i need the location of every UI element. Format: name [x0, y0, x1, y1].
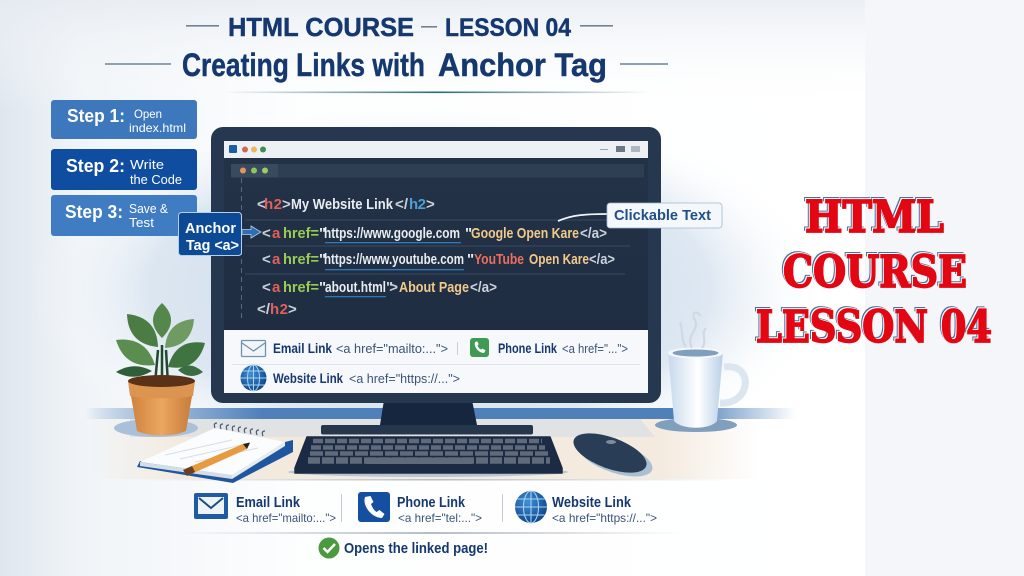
callout: clickable text — [558, 203, 722, 228]
icon: website globe — [515, 491, 547, 523]
code line: youtube link: href= — [283, 251, 319, 268]
code line: google link: " — [319, 225, 326, 242]
code line: h2 open — [257, 196, 435, 213]
desk — [85, 408, 795, 480]
code line: h2 open: < — [257, 196, 266, 213]
monitor stand — [321, 400, 533, 434]
code line: h2 close: </ — [257, 301, 271, 318]
icon: mouse — [569, 425, 657, 484]
arrow: anchor tag to code — [242, 226, 261, 238]
code line: google link: a — [272, 225, 281, 242]
title: Anchor Tag — [438, 47, 607, 83]
overlay heading — [756, 192, 992, 353]
code line: h2 open: h2 — [264, 196, 282, 213]
link info panel: <a href="https://..."> — [349, 371, 460, 386]
code line: google link: </a> — [580, 225, 607, 242]
step 3 box — [51, 195, 197, 236]
code line: h2 close: h2 — [270, 301, 288, 318]
link type row — [180, 491, 685, 534]
code line: about link: "> — [386, 279, 398, 296]
editor tab bar — [231, 164, 644, 178]
link type row: <a href="tel:..."> — [398, 511, 482, 525]
link info panel: Phone Link — [498, 340, 557, 356]
code line: youtube link — [262, 251, 615, 270]
code line: about link: " — [319, 279, 326, 296]
icon: phone — [358, 492, 390, 522]
link info panel — [224, 330, 648, 393]
callout: anchor tag — [178, 212, 242, 256]
code line: about link: href= — [283, 279, 319, 296]
code line: about link — [262, 279, 497, 297]
icon: green phone — [470, 338, 489, 357]
code line: h2 open: > — [282, 196, 291, 213]
code line: about link: about.html — [325, 279, 386, 296]
step 3 box: Step 3: — [65, 202, 123, 222]
step 2 box: Step 2: — [66, 156, 125, 176]
confirmation message — [318, 538, 488, 558]
icon: envelope outline — [242, 340, 266, 356]
step 2 box: Write — [130, 157, 164, 172]
code line: about link: About Page — [399, 279, 469, 296]
code line: about link: < — [262, 279, 271, 296]
code line: google link: Google Open Kare — [471, 225, 579, 242]
title: LESSON 04 — [445, 14, 571, 42]
overlay heading: HTML — [805, 192, 944, 243]
link info panel: <a href="mailto:..."> — [336, 341, 448, 356]
code line: youtube link: Open Kare — [529, 251, 589, 268]
icon: globe — [240, 365, 266, 391]
link type row: Website Link — [552, 494, 632, 511]
step 2 box: the Code — [130, 172, 182, 187]
code line: youtube link: YouTube — [474, 251, 524, 268]
icon: coffee mug — [655, 313, 745, 432]
code line: youtube link: https://www.youtube.com — [324, 251, 464, 268]
browser toolbar — [224, 141, 648, 158]
icon: potted plant — [114, 303, 205, 437]
callout: clickable text: Clickable Text — [614, 207, 711, 224]
code line: google link: href= — [283, 225, 319, 242]
link type row: <a href="https://..."> — [552, 511, 657, 525]
step 3 box: Save & — [129, 201, 168, 216]
link type row: Phone Link — [397, 494, 466, 511]
link info panel: <a href="..."> — [562, 341, 628, 356]
step 1 box: Step 1: — [67, 106, 125, 126]
icon: green check — [318, 538, 340, 558]
monitor — [211, 127, 661, 403]
callout: anchor tag: Anchor — [185, 220, 236, 237]
code line: h2 open: > — [426, 196, 435, 213]
code line: youtube link: " — [319, 251, 326, 268]
code line: h2 close: > — [288, 301, 297, 318]
link info panel: Email Link — [273, 340, 332, 356]
link type row: Email Link — [236, 494, 301, 511]
title — [105, 12, 668, 93]
code line: youtube link: a — [272, 251, 281, 268]
confirmation message: Opens the linked page! — [344, 540, 488, 557]
code line: about link: </a> — [470, 279, 497, 296]
code line: about link: a — [272, 279, 281, 296]
overlay heading: COURSE — [783, 247, 967, 298]
title: Creating Links with — [182, 47, 425, 83]
code line: h2 open: h2 — [409, 196, 426, 213]
code editor screen — [224, 141, 648, 330]
icon: email — [194, 493, 228, 519]
code line: youtube link: </a> — [589, 251, 615, 268]
code line: google link: " — [465, 225, 472, 242]
link info panel: Website Link — [273, 370, 343, 386]
code line: google link: < — [262, 225, 271, 242]
step 2 box — [51, 149, 197, 190]
icon: notebook and pencil — [137, 423, 293, 483]
link type row: <a href="mailto:..."> — [236, 511, 336, 525]
code line: google link — [262, 225, 607, 243]
title: HTML COURSE — [228, 12, 414, 42]
code line: google link: https://www.google.com — [324, 225, 460, 242]
step 1 box: index.html — [129, 121, 186, 135]
code line: youtube link: " — [467, 251, 474, 268]
code line: h2 close — [257, 301, 297, 318]
code line: h2 open: </ — [395, 196, 409, 213]
code line: h2 open: My Website Link — [291, 196, 394, 213]
step 3 box: Test — [129, 215, 154, 230]
step 1 box — [51, 100, 197, 139]
code line: youtube link: < — [262, 251, 271, 268]
step 1 box: Open — [134, 107, 162, 121]
icon: keyboard — [288, 437, 568, 477]
callout: anchor tag: Tag <a> — [186, 237, 239, 254]
